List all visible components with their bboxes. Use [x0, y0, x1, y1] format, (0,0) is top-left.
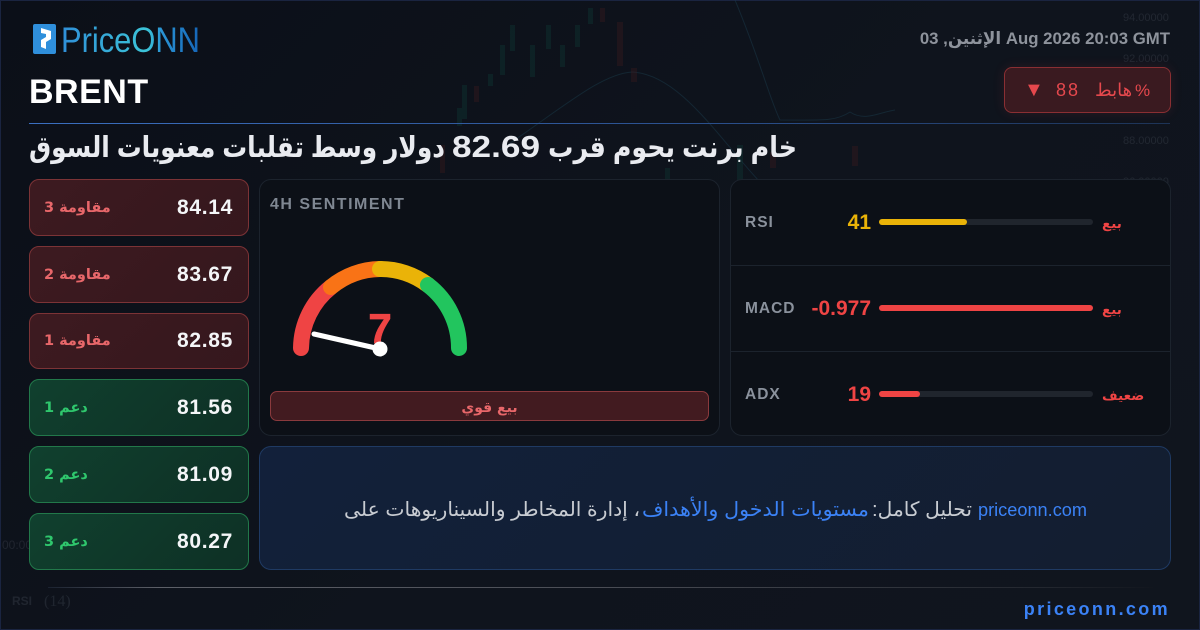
gauge needle [314, 334, 388, 356]
gauge value: 7 [368, 305, 392, 352]
background chart: (14) [44, 593, 71, 610]
background chart: 00:00 [2, 538, 32, 552]
support 1 [29, 379, 249, 436]
RSI row: بيع [1102, 216, 1122, 232]
logo [33, 23, 200, 55]
RSI row [745, 211, 1122, 234]
MACD row: -0.977 [811, 297, 871, 320]
sentiment badge: ▼ [1024, 79, 1044, 101]
sentiment badge: % [1135, 81, 1150, 100]
resistance 1 [29, 313, 249, 369]
ADX row: ضعيف [1102, 388, 1144, 404]
background chart: 86.00000 [1123, 176, 1169, 188]
ADX row: ADX [745, 386, 781, 403]
footer line [48, 587, 1153, 588]
RSI row: 41 [848, 211, 871, 234]
support 2: دعم 2 [44, 466, 88, 482]
support 1: 81.56 [177, 396, 233, 418]
sentiment badge [1004, 67, 1171, 113]
resistance 1: مقاومة 1 [44, 333, 111, 349]
icon: logo mark [33, 24, 56, 54]
resistance 2: 83.67 [177, 262, 233, 286]
resistance 2 [29, 246, 249, 303]
gauge [293, 261, 467, 356]
background chart: 92.00000 [1123, 53, 1169, 65]
ADX row: 19 [848, 383, 871, 406]
support 2: 81.09 [177, 462, 233, 486]
panel heading: 4H SENTIMENT [270, 196, 405, 213]
resistance 3 [29, 179, 249, 236]
panel: price levels [29, 179, 249, 570]
panel: 4H sentiment [259, 179, 720, 436]
resistance 1: 82.85 [177, 329, 233, 352]
call to action text: تحليل كامل: [872, 499, 972, 521]
sentiment badge: 88 [1056, 80, 1080, 100]
background chart: RSI [12, 594, 32, 608]
panel: indicators [730, 179, 1171, 436]
headline: 82.69 [452, 129, 540, 164]
panel: call to action [259, 446, 1171, 570]
support 3: دعم 3 [44, 534, 88, 550]
sentiment badge: هابط [1095, 80, 1132, 100]
headline [29, 129, 797, 164]
background chart: 88.00000 [1123, 135, 1169, 147]
headline: دولار وسط تقلبات معنويات السوق [29, 132, 445, 164]
RSI row: RSI [745, 214, 774, 231]
resistance 2: مقاومة 2 [44, 266, 111, 282]
call to action text: priceonn.com [978, 500, 1087, 520]
sentiment label [270, 391, 709, 421]
footer url: priceonn.com [1024, 599, 1170, 619]
sentiment label: بيع قوي [461, 400, 518, 416]
support 2 [29, 446, 249, 503]
instrument title: BRENT [29, 73, 149, 111]
support 3 [29, 513, 249, 570]
resistance 3: 84.14 [177, 196, 233, 218]
date: الإثنين, 03 Aug 2026 20:03 GMT [920, 29, 1170, 48]
MACD row: MACD [745, 300, 796, 317]
ADX row [731, 351, 1170, 436]
MACD row [731, 265, 1170, 351]
headline: خام برنت يحوم قرب [548, 132, 797, 164]
call to action text: ، إدارة المخاطر والسيناريوهات على [344, 499, 640, 522]
support 1: دعم 1 [44, 400, 88, 416]
resistance 3: مقاومة 3 [44, 200, 111, 216]
call to action text [344, 496, 1087, 522]
support 3: 80.27 [177, 530, 233, 552]
background chart: 90.00000 [1123, 94, 1169, 106]
divider [29, 123, 1170, 124]
MACD row: بيع [1102, 302, 1122, 318]
call to action text: مستويات الدخول والأهداف [642, 497, 869, 521]
background chart: 94.00000 [1123, 12, 1169, 24]
